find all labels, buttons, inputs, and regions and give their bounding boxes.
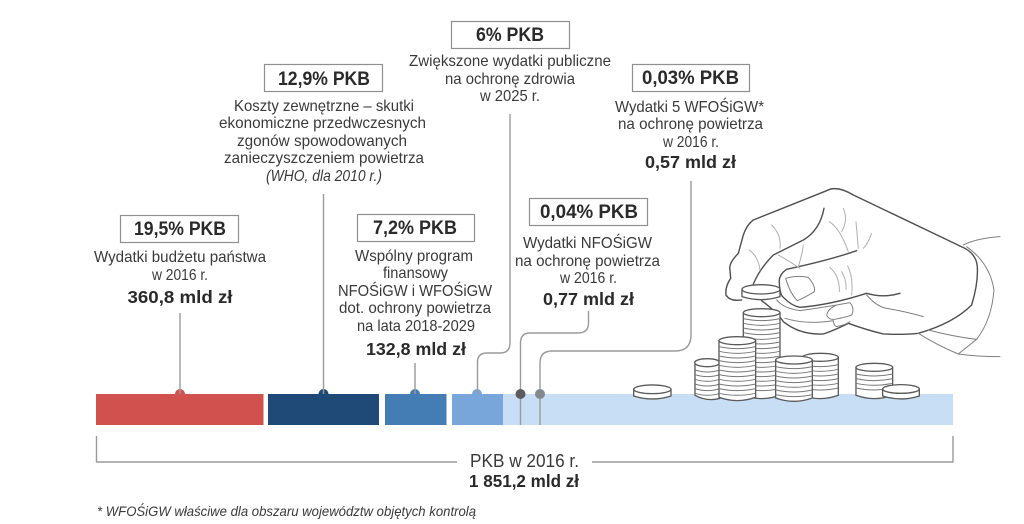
callout: 19,5% PKB: Wydatki budżetu państwa	[94, 249, 266, 266]
callout: 7,2% PKB	[338, 214, 492, 359]
bar segment: 6%	[452, 389, 503, 425]
icon: held coin	[742, 285, 780, 300]
icon: small coin stack	[856, 363, 893, 399]
callout: 0,03% PKB: 0,57 mld zł	[645, 152, 736, 172]
callout: 7,2% PKB: na lata 2018-2029	[357, 318, 475, 335]
callout: 7,2% PKB: finansowy	[383, 265, 448, 282]
callout: 12,9% PKB: 12,9% PKB	[278, 69, 370, 90]
callout: 12,9% PKB: zanieczyszczeniem powietrza	[224, 150, 424, 167]
callout: 0,04% PKB: 0,77 mld zł	[543, 289, 634, 309]
callout: 12,9% PKB	[219, 64, 426, 185]
panel: GDP bar	[96, 389, 953, 425]
callout: 0,03% PKB: Wydatki 5 WFOŚiGW*	[615, 97, 764, 116]
connector: 19,5%	[179, 313, 181, 394]
callout: 19,5% PKB: 19,5% PKB	[134, 219, 226, 240]
icon: coins	[634, 285, 919, 401]
icon: hand	[726, 189, 1000, 357]
bar segment: 12,9%	[268, 389, 379, 425]
bar segment: remaining GDP	[503, 394, 953, 425]
callout: 0,04% PKB: Wydatki NFOŚiGW	[523, 233, 652, 252]
connector: 7,2%	[414, 363, 416, 394]
callout: 19,5% PKB: w 2016 r.	[151, 267, 208, 284]
callout: 0,03% PKB	[615, 64, 764, 172]
callout: 6% PKB: Zwiększone wydatki publiczne	[409, 53, 611, 70]
icon: single coin right	[883, 385, 919, 399]
icon: single coin left	[634, 385, 671, 399]
callout: 0,04% PKB: 0,04% PKB	[540, 202, 638, 223]
connector: 0,04%	[516, 311, 588, 425]
footnote: * WFOŚiGW właściwe dla obszaru województw objętych kontrolą	[97, 502, 476, 519]
icon: coin stack front left	[719, 337, 756, 401]
label: GDP total: 1 851,2 mld zł	[469, 471, 579, 491]
callout: 7,2% PKB: 7,2% PKB	[373, 218, 457, 239]
icon: coin stack front right	[776, 356, 812, 401]
icon: tall coin stack	[743, 309, 780, 399]
callout: 0,04% PKB: w 2016 r.	[559, 270, 617, 287]
callout: 7,2% PKB: NFOŚiGW i WFOŚiGW	[338, 281, 492, 300]
callout: 7,2% PKB: Wspólny program	[355, 248, 473, 265]
label: GDP total: PKB w 2016 r.	[470, 451, 579, 471]
callout: 7,2% PKB: dot. ochrony powietrza	[339, 300, 491, 317]
callout: 0,04% PKB	[515, 198, 660, 309]
callout: 6% PKB: 6% PKB	[476, 25, 544, 46]
callout: 0,03% PKB: w 2016 r.	[662, 134, 719, 151]
bar segment: 19,5%	[96, 389, 264, 425]
callout: 6% PKB: na ochronę zdrowia	[445, 71, 575, 88]
connector: 0,03%	[535, 181, 691, 425]
illustration: hand stacking coins	[634, 189, 1000, 401]
callout: 12,9% PKB: ekonomiczne przedwczesnych	[219, 115, 426, 132]
icon: coin stack left	[695, 359, 720, 400]
callout: 0,03% PKB: na ochronę powietrza	[618, 116, 763, 133]
connector: 12,9%	[322, 194, 324, 394]
label: GDP total	[469, 451, 579, 491]
callout: 12,9% PKB: (WHO, dla 2010 r.)	[266, 168, 382, 185]
callout: 0,03% PKB: 0,03% PKB	[642, 68, 739, 89]
icon: coin stack right back	[802, 353, 838, 399]
callout: 12,9% PKB: zgonów spowodowanych	[237, 133, 407, 150]
callout: 19,5% PKB: 360,8 mld zł	[128, 287, 233, 307]
callout: 6% PKB: w 2025 r.	[479, 88, 540, 105]
callout: 7,2% PKB: 132,8 mld zł	[366, 339, 466, 359]
bracket: GDP total	[96, 436, 953, 462]
callout: 19,5% PKB	[94, 216, 266, 307]
callout: 12,9% PKB: Koszty zewnętrzne – skutki	[234, 98, 414, 115]
callout: 6% PKB	[409, 22, 611, 105]
callout: 0,04% PKB: na ochronę powietrza	[515, 253, 660, 270]
bar segment: 7,2%	[385, 389, 446, 425]
connector: 6%	[478, 114, 510, 394]
